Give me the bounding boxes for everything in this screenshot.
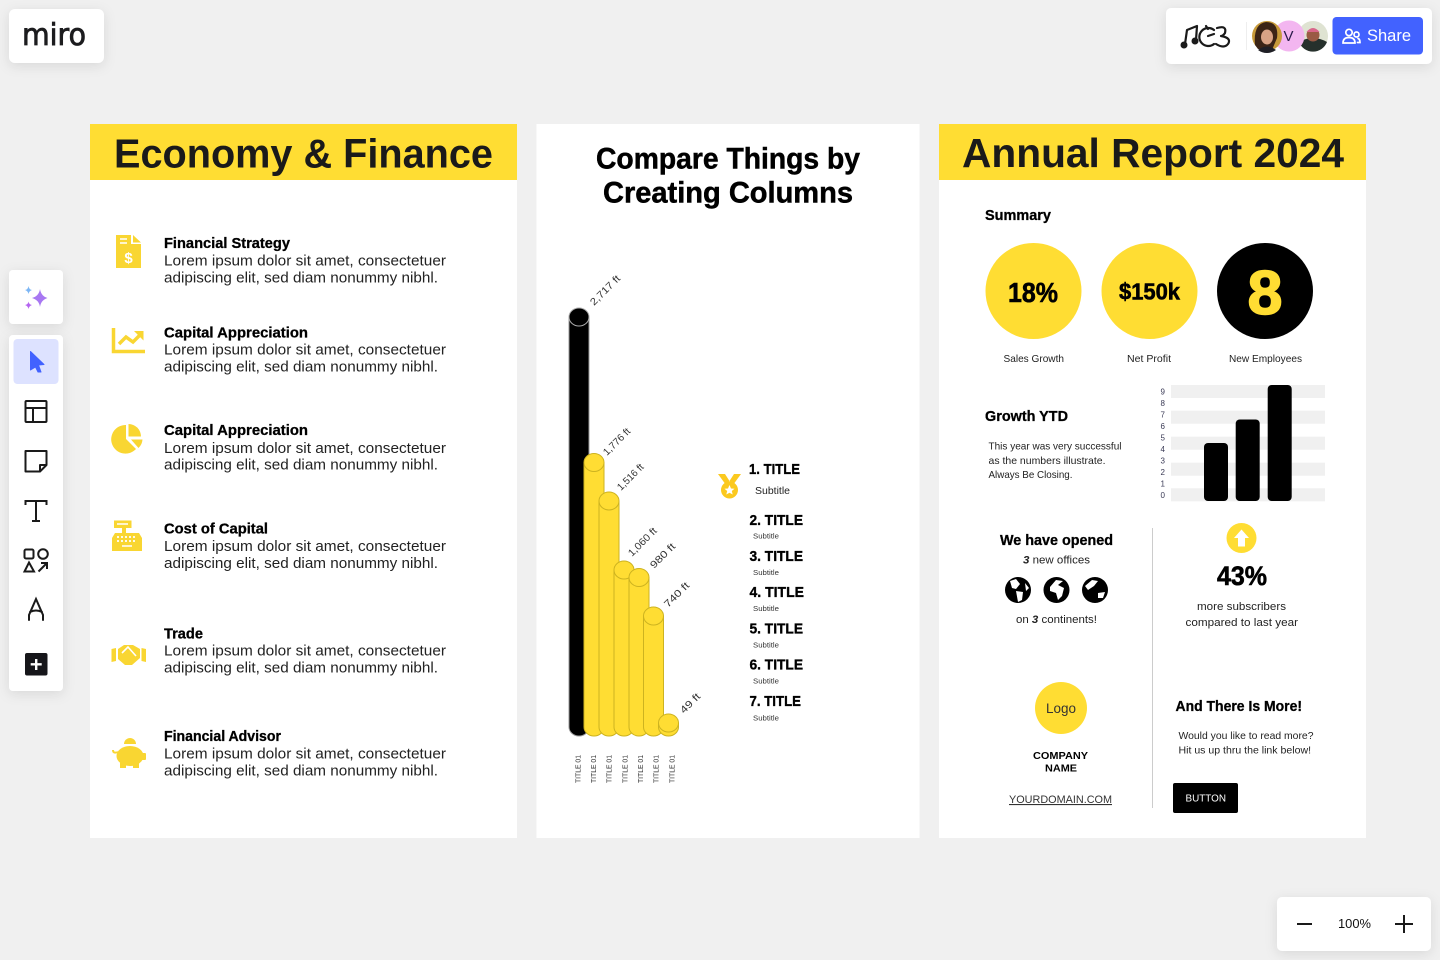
- stat: net profit: Net Profit: [1127, 353, 1171, 365]
- text block: offices: on 3 continents!: [1016, 614, 1097, 626]
- item: cost of capital: [112, 520, 446, 572]
- bar chart: growth: [1160, 385, 1325, 501]
- logo: miro: miro: [22, 18, 86, 53]
- title: Creating Columns: [603, 176, 853, 210]
- header band: [939, 124, 1366, 180]
- icon: medal: [718, 474, 741, 498]
- zoom value: 100%: [1338, 916, 1371, 931]
- company logo block: Logo: [1046, 700, 1076, 716]
- bar chart: growth: 6: [1160, 422, 1166, 431]
- value labels: 1,776 ft: [601, 426, 633, 458]
- item: trade: adipiscing elit, sed diam nonummy nibhl.: [164, 660, 438, 676]
- item: financial advisor: adipiscing elit, sed diam nonummy nibhl.: [164, 762, 438, 780]
- header band: [90, 124, 517, 180]
- stat: new employees: New Employees: [1229, 353, 1302, 365]
- legend list: 5. TITLE: [750, 620, 803, 638]
- button: share: Share: [1367, 26, 1411, 45]
- icon: text tool: [26, 501, 46, 521]
- item: financial advisor: Lorem ipsum dolor sit amet, consectetuer: [164, 746, 446, 762]
- AI toolbar button: [9, 270, 63, 324]
- stat: net profit: $150k: [1119, 278, 1180, 304]
- item: capital appreciation pie: [111, 422, 446, 474]
- value labels: [588, 273, 703, 716]
- stat: subscribers: compared to last year: [1186, 617, 1298, 629]
- heading: summary: Summary: [985, 207, 1052, 224]
- item: trade: Trade: [164, 626, 203, 642]
- stat: sales growth: 18%: [1008, 277, 1058, 308]
- item: capital appreciation pie: Lorem ipsum dolor sit amet, consectetuer: [164, 440, 446, 457]
- value labels: 980 ft: [648, 541, 678, 571]
- legend list: Subtitle: [753, 604, 779, 613]
- axis labels: TITLE 01: [604, 755, 614, 783]
- icon: plus: [1395, 915, 1413, 933]
- company logo block: NAME: [1045, 762, 1077, 774]
- bar chart: growth: 4: [1160, 445, 1166, 454]
- item: financial strategy: Financial Strategy: [164, 235, 291, 252]
- stat: subscribers: [1186, 523, 1298, 629]
- legend list: 4. TITLE: [750, 584, 804, 601]
- icon: finance document: [116, 235, 141, 268]
- title: Annual Report 2024: [962, 130, 1344, 176]
- title: Compare Things by: [596, 142, 860, 176]
- avatar: first user: [1252, 21, 1282, 53]
- column 7: [658, 714, 678, 736]
- icon: globes: [1005, 577, 1108, 603]
- text block: offices: [1000, 532, 1113, 626]
- title: Economy & Finance: [114, 130, 493, 176]
- value labels: 740 ft: [662, 580, 692, 610]
- bar chart: growth: 1: [1160, 480, 1166, 488]
- legend list: Subtitle: [753, 714, 779, 722]
- company logo block: COMPANY: [1033, 750, 1088, 762]
- icon: pen: [29, 599, 43, 620]
- avatar: third user: [1298, 21, 1328, 52]
- icon: shapes: [24, 549, 48, 572]
- icon: minus: [1297, 923, 1312, 925]
- icon: up arrow: [1226, 523, 1256, 553]
- avatar: V: [1274, 20, 1304, 52]
- item: financial strategy: adipiscing elit, sed diam nonummy nibhl.: [164, 270, 438, 286]
- panel: economy and finance: [90, 124, 517, 838]
- text block: and there is more: [1176, 698, 1314, 756]
- value labels: 1,060 ft: [626, 526, 660, 559]
- legend list: Subtitle: [753, 640, 779, 650]
- panel: annual report: [939, 124, 1366, 838]
- bar chart: growth: 9: [1160, 388, 1166, 396]
- chart: cylinders: [569, 308, 678, 736]
- legend list: Subtitle: [753, 532, 779, 540]
- item: cost of capital: Cost of Capital: [164, 520, 268, 538]
- column 6: [644, 607, 664, 736]
- stat: new employees: [1217, 243, 1313, 365]
- item: capital appreciation pie: adipiscing elit, sed diam nonummy nibhl.: [164, 456, 438, 474]
- bar chart: growth: 2: [1160, 468, 1166, 477]
- bar chart: growth: 8: [1160, 399, 1166, 408]
- axis labels: TITLE 01: [574, 755, 582, 783]
- icon: template: [26, 401, 46, 422]
- legend list: [749, 461, 804, 722]
- icon: finance document: $: [124, 250, 133, 267]
- icon: pie chart: [111, 424, 142, 454]
- text block: and there is more: Hit us up thru the link below!: [1178, 744, 1311, 756]
- icon: people: [1343, 29, 1360, 43]
- axis labels: [574, 755, 676, 783]
- top right toolbar: [1166, 8, 1432, 64]
- value labels: 1,516 ft: [615, 462, 647, 493]
- bar chart: growth: 3: [1160, 456, 1166, 466]
- text block: growth ytd: This year was very successful: [988, 440, 1122, 452]
- left toolbar: [9, 335, 63, 691]
- legend list: Subtitle: [753, 676, 779, 686]
- item: financial strategy: [116, 235, 446, 286]
- legend list: 3. TITLE: [750, 548, 803, 565]
- panel: compare columns: [536, 124, 920, 838]
- icon: add more: [25, 653, 48, 676]
- column 5: [629, 568, 649, 736]
- value labels: 2,717 ft: [588, 273, 623, 308]
- icon: sticky note: [26, 451, 46, 472]
- logo: miro: [9, 9, 104, 63]
- divider: [1152, 528, 1153, 808]
- button: share: [1332, 17, 1423, 54]
- text block: and there is more: And There Is More!: [1176, 698, 1302, 715]
- text block: growth ytd: Always Be Closing.: [988, 469, 1072, 481]
- value labels: 49 ft: [678, 691, 703, 716]
- legend list: 2. TITLE: [750, 512, 803, 529]
- legend list: 7. TITLE: [750, 693, 801, 710]
- text block: growth ytd: Growth YTD: [985, 408, 1068, 425]
- icon: handshake: [112, 645, 146, 665]
- icon: growth chart: [114, 328, 145, 352]
- item: cost of capital: Lorem ipsum dolor sit amet, consectetuer: [164, 538, 446, 555]
- text block: growth ytd: [985, 408, 1122, 481]
- button: [1173, 783, 1238, 813]
- column 3: [599, 492, 619, 736]
- item: capital appreciation: Capital Appreciation: [164, 324, 308, 342]
- icon: sparkles: [25, 286, 48, 309]
- axis labels: TITLE 01: [620, 755, 630, 783]
- company logo block: [1009, 682, 1112, 806]
- axis labels: TITLE 01: [589, 755, 598, 783]
- text block: offices: 3 new offices: [1023, 554, 1091, 566]
- bar chart: growth: 7: [1160, 410, 1166, 420]
- legend list: Subtitle: [753, 568, 779, 577]
- stat: net profit: [1102, 243, 1198, 365]
- axis labels: TITLE 01: [668, 755, 676, 783]
- item: financial strategy: Lorem ipsum dolor sit amet, consectetuer: [164, 252, 446, 270]
- stat: sales growth: Sales Growth: [1004, 353, 1064, 365]
- legend list: Subtitle: [755, 486, 790, 497]
- stat: subscribers: more subscribers: [1197, 601, 1287, 613]
- icon: piggy bank: [113, 738, 146, 768]
- item: cost of capital: adipiscing elit, sed diam nonummy nibhl.: [164, 555, 438, 572]
- column 2: [584, 454, 604, 736]
- item: trade: Lorem ipsum dolor sit amet, consectetuer: [164, 642, 446, 660]
- item: financial advisor: [113, 728, 446, 780]
- title: [596, 142, 860, 210]
- avatar: V: V: [1283, 28, 1294, 45]
- button: BUTTON: [1186, 792, 1226, 804]
- legend list: 1. TITLE: [749, 461, 800, 478]
- item: capital appreciation: adipiscing elit, sed diam nonummy nibhl.: [164, 358, 438, 376]
- icon: cursor selected: [14, 339, 58, 384]
- item: trade: [112, 626, 446, 676]
- stat: sales growth: [986, 243, 1082, 365]
- icon: board scribble logo: [1182, 26, 1229, 47]
- item: capital appreciation pie: Capital Appreciation: [164, 422, 308, 439]
- text block: and there is more: Would you like to read more?: [1178, 730, 1314, 742]
- stat: subscribers: 43%: [1217, 561, 1267, 591]
- stat: new employees: 8: [1248, 259, 1282, 328]
- bar chart: growth: 0: [1160, 491, 1166, 500]
- axis labels: TITLE 01: [652, 755, 660, 783]
- legend list: 6. TITLE: [750, 656, 803, 674]
- item: capital appreciation: [114, 324, 446, 376]
- item: capital appreciation: Lorem ipsum dolor sit amet, consectetuer: [164, 342, 446, 358]
- column 1: [569, 308, 589, 736]
- zoom control: [1277, 897, 1431, 951]
- column 4: [614, 561, 634, 736]
- text block: offices: We have opened: [1000, 532, 1113, 549]
- axis labels: TITLE 01: [636, 755, 645, 783]
- company logo block: YOURDOMAIN.COM: [1009, 794, 1112, 806]
- bar chart: growth: 5: [1160, 434, 1166, 442]
- icon: cash register: [112, 520, 142, 551]
- text block: growth ytd: as the numbers illustrate.: [988, 455, 1106, 467]
- item: financial advisor: Financial Advisor: [164, 728, 281, 745]
